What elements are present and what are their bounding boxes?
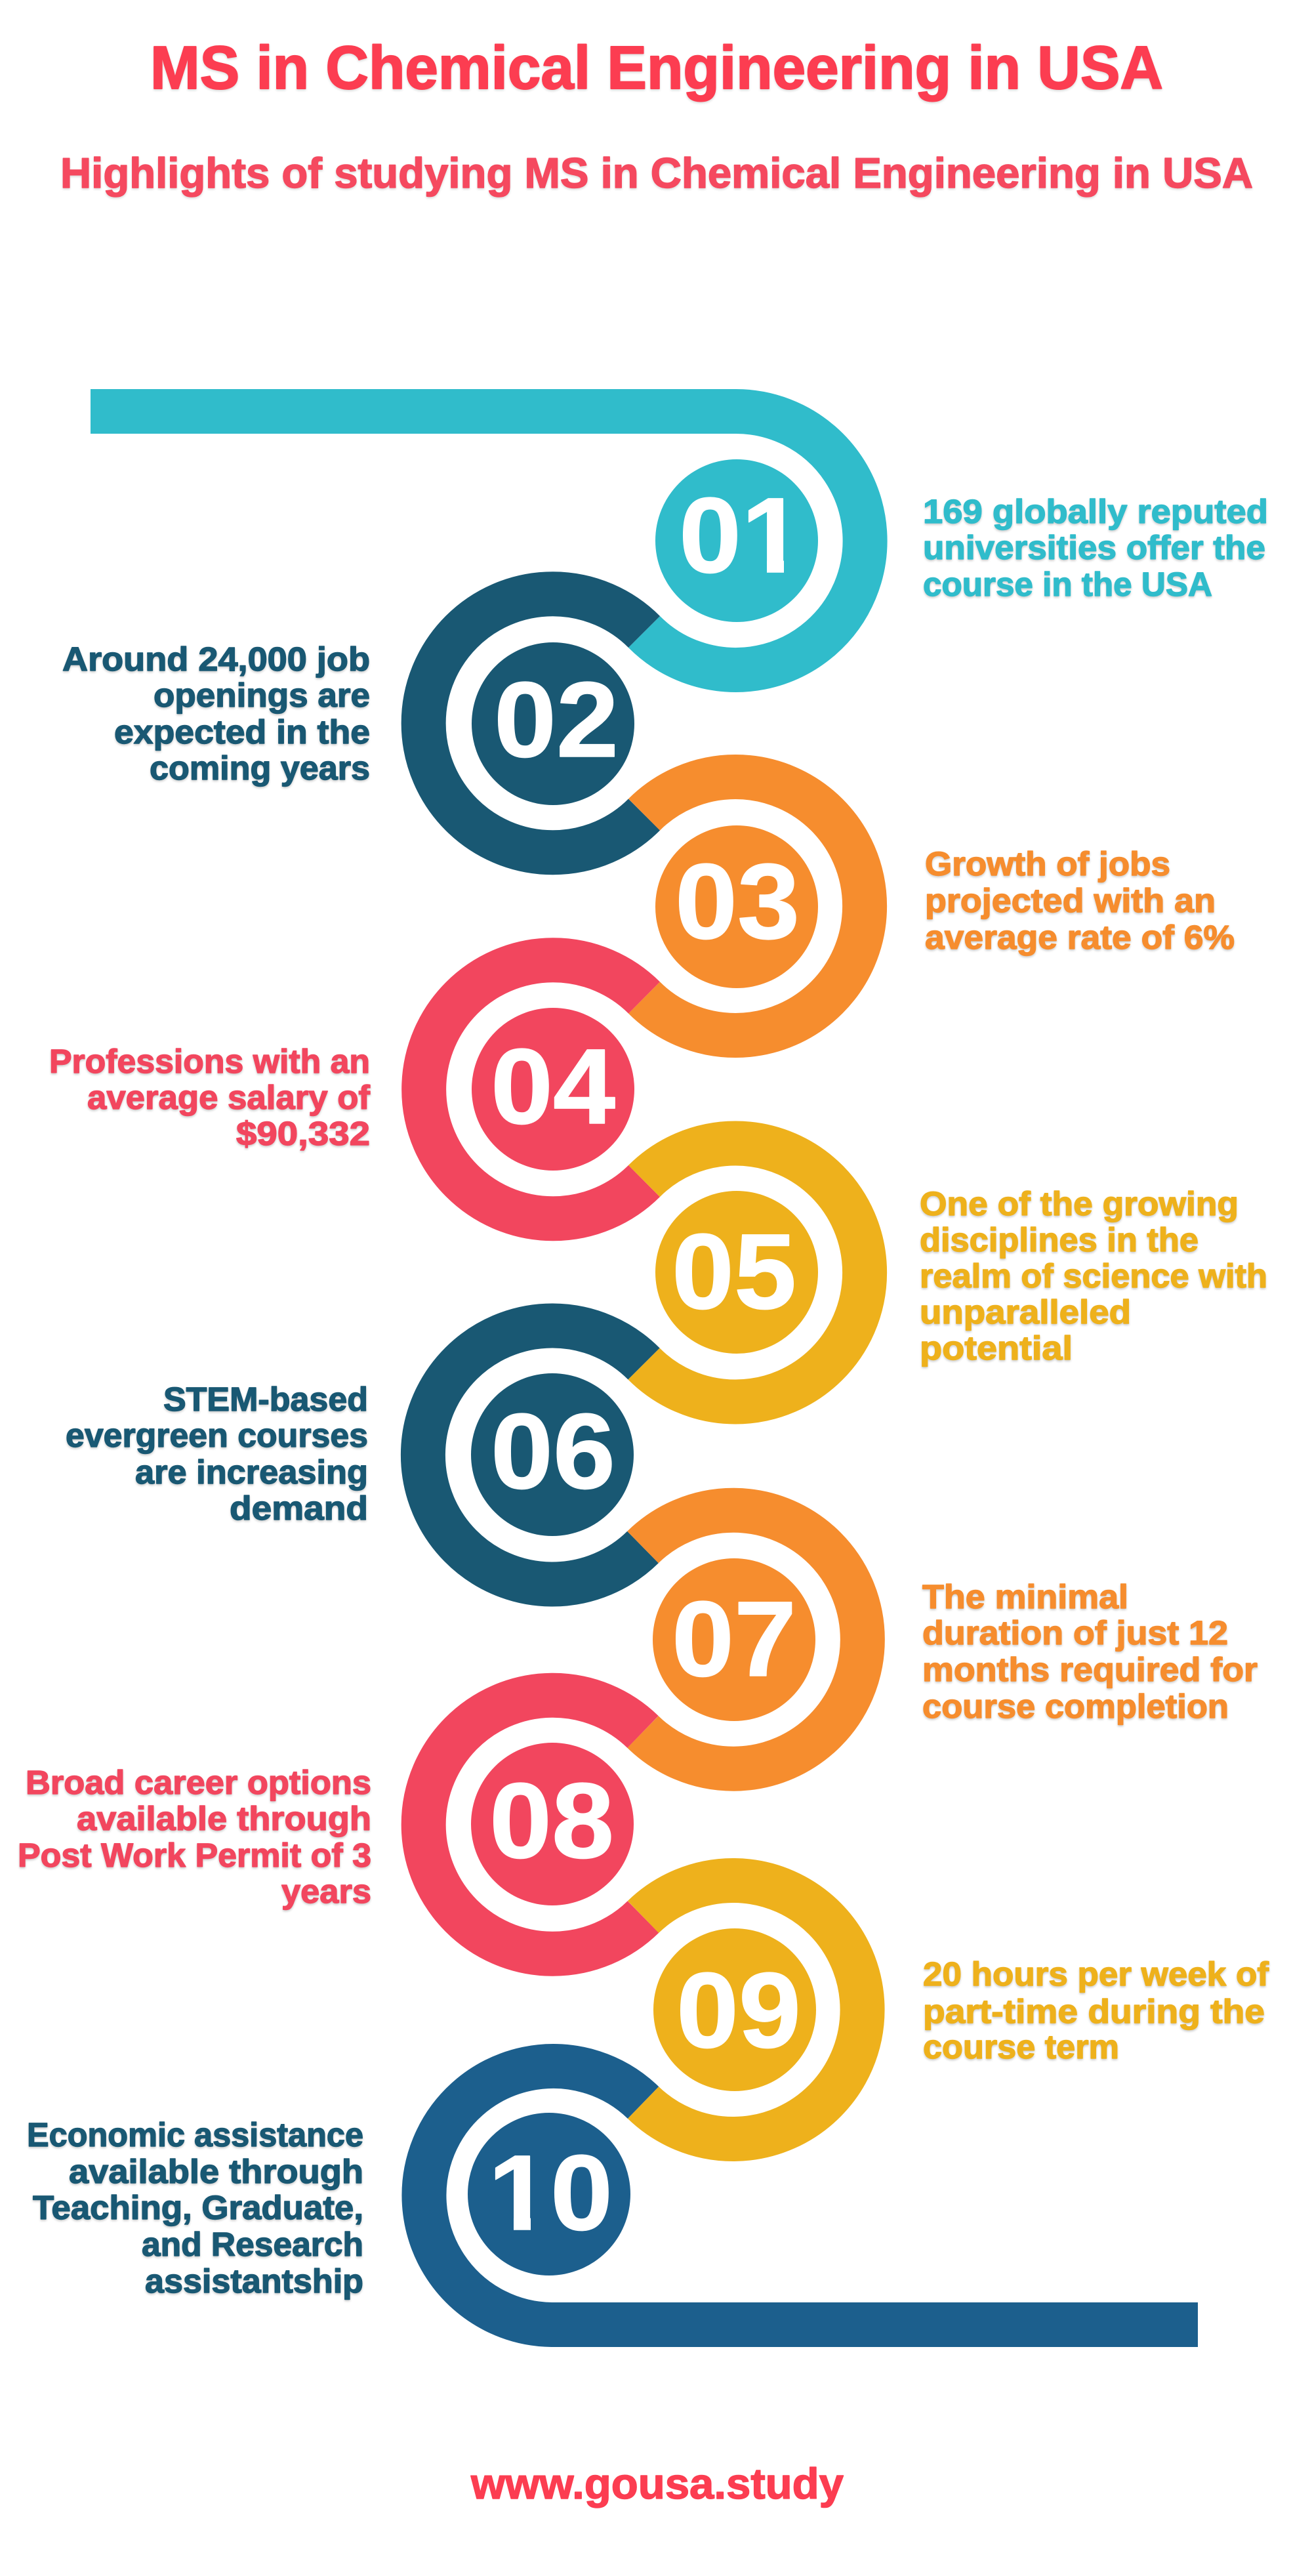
step 01 <box>91 411 1268 670</box>
step 09 <box>643 1880 1269 2139</box>
number: 07 <box>672 1579 796 1699</box>
number circle <box>468 2113 630 2275</box>
description: available through <box>69 2153 363 2190</box>
description: coming years <box>150 749 370 787</box>
number: 08 <box>489 1760 614 1880</box>
title: MS in Chemical Engineering in USA <box>150 33 1163 102</box>
step 02 <box>62 594 644 852</box>
description: 20 hours per week of <box>923 1955 1269 1993</box>
description <box>49 1043 371 1152</box>
description: and Research <box>142 2226 363 2263</box>
step 08 <box>18 1695 643 1954</box>
number: 02 <box>494 659 619 779</box>
number: 10 <box>488 2132 613 2253</box>
subtitle: Highlights of studying MS in Chemical Engineering in USA <box>60 149 1253 197</box>
step 10 <box>27 2066 1198 2325</box>
number: 09 <box>676 1950 801 2070</box>
description: The minimal <box>922 1578 1128 1615</box>
number: 04 <box>491 1026 615 1146</box>
description: expected in the <box>114 713 370 751</box>
ring <box>644 777 865 1035</box>
description: evergreen courses <box>66 1417 368 1454</box>
description: average rate of 6% <box>925 919 1235 956</box>
description: unparalleled <box>920 1293 1131 1331</box>
step 04 <box>49 960 644 1218</box>
number circle <box>653 1928 816 2091</box>
description: available through <box>77 1800 371 1837</box>
description: Broad career options <box>26 1764 371 1801</box>
description: demand <box>230 1489 368 1527</box>
description: Economic assistance <box>27 2116 363 2153</box>
description: potential <box>920 1329 1073 1367</box>
description: $90,332 <box>236 1115 370 1152</box>
description: months required for <box>922 1651 1258 1688</box>
step 06 <box>66 1326 644 1585</box>
description: One of the growing <box>920 1185 1239 1222</box>
description <box>923 1955 1269 2066</box>
description <box>922 1578 1258 1725</box>
description: part-time during the <box>923 1993 1265 2030</box>
step 07 <box>643 1510 1258 1769</box>
description: course completion <box>922 1688 1229 1725</box>
number: 01 <box>679 475 804 595</box>
number circle <box>472 642 634 805</box>
description: are increasing <box>135 1453 368 1491</box>
number circle <box>471 1743 634 1905</box>
description <box>62 640 370 787</box>
ring <box>423 1326 644 1585</box>
ring <box>643 1510 863 1769</box>
number: 05 <box>672 1211 796 1331</box>
description <box>925 845 1235 956</box>
description: projected with an <box>925 882 1216 919</box>
number circle <box>655 825 818 988</box>
step 03 <box>644 777 1235 1035</box>
ring <box>424 594 644 852</box>
description: Growth of jobs <box>925 845 1170 883</box>
number circle <box>655 1191 818 1354</box>
description <box>920 1185 1267 1367</box>
description: disciplines in the <box>920 1221 1199 1258</box>
description: 169 globally reputed <box>923 493 1268 530</box>
ring <box>643 1880 863 2139</box>
ring <box>424 960 644 1218</box>
ring <box>424 1695 643 1954</box>
ring with bottom bar <box>424 2066 1198 2325</box>
description: course in the USA <box>923 566 1212 603</box>
description: Post Work Permit of 3 <box>18 1837 371 1874</box>
description: universities offer the <box>923 529 1265 566</box>
description: assistantship <box>145 2262 363 2300</box>
description: duration of just 12 <box>922 1614 1228 1652</box>
step 05 <box>644 1144 1267 1402</box>
ring with top bar <box>91 411 865 670</box>
description: Teaching, Graduate, <box>33 2189 363 2226</box>
description: openings are <box>154 676 370 714</box>
number circle <box>655 459 818 622</box>
description: average salary of <box>87 1079 371 1116</box>
description <box>27 2116 363 2300</box>
description <box>923 493 1268 603</box>
footer url: www.gousa.study <box>470 2459 844 2508</box>
number: 03 <box>675 841 800 961</box>
description: realm of science with <box>920 1257 1267 1295</box>
description: STEM-based <box>163 1381 368 1418</box>
description <box>66 1381 368 1527</box>
description: Professions with an <box>49 1043 370 1080</box>
description: course term <box>923 2028 1119 2066</box>
number circle <box>472 1008 634 1171</box>
description: years <box>281 1873 371 1910</box>
description: Around 24,000 job <box>62 640 370 678</box>
number: 06 <box>491 1391 615 1511</box>
description <box>18 1764 371 1910</box>
number circle <box>653 1558 815 1721</box>
number circle <box>471 1373 634 1536</box>
ring <box>644 1144 865 1402</box>
